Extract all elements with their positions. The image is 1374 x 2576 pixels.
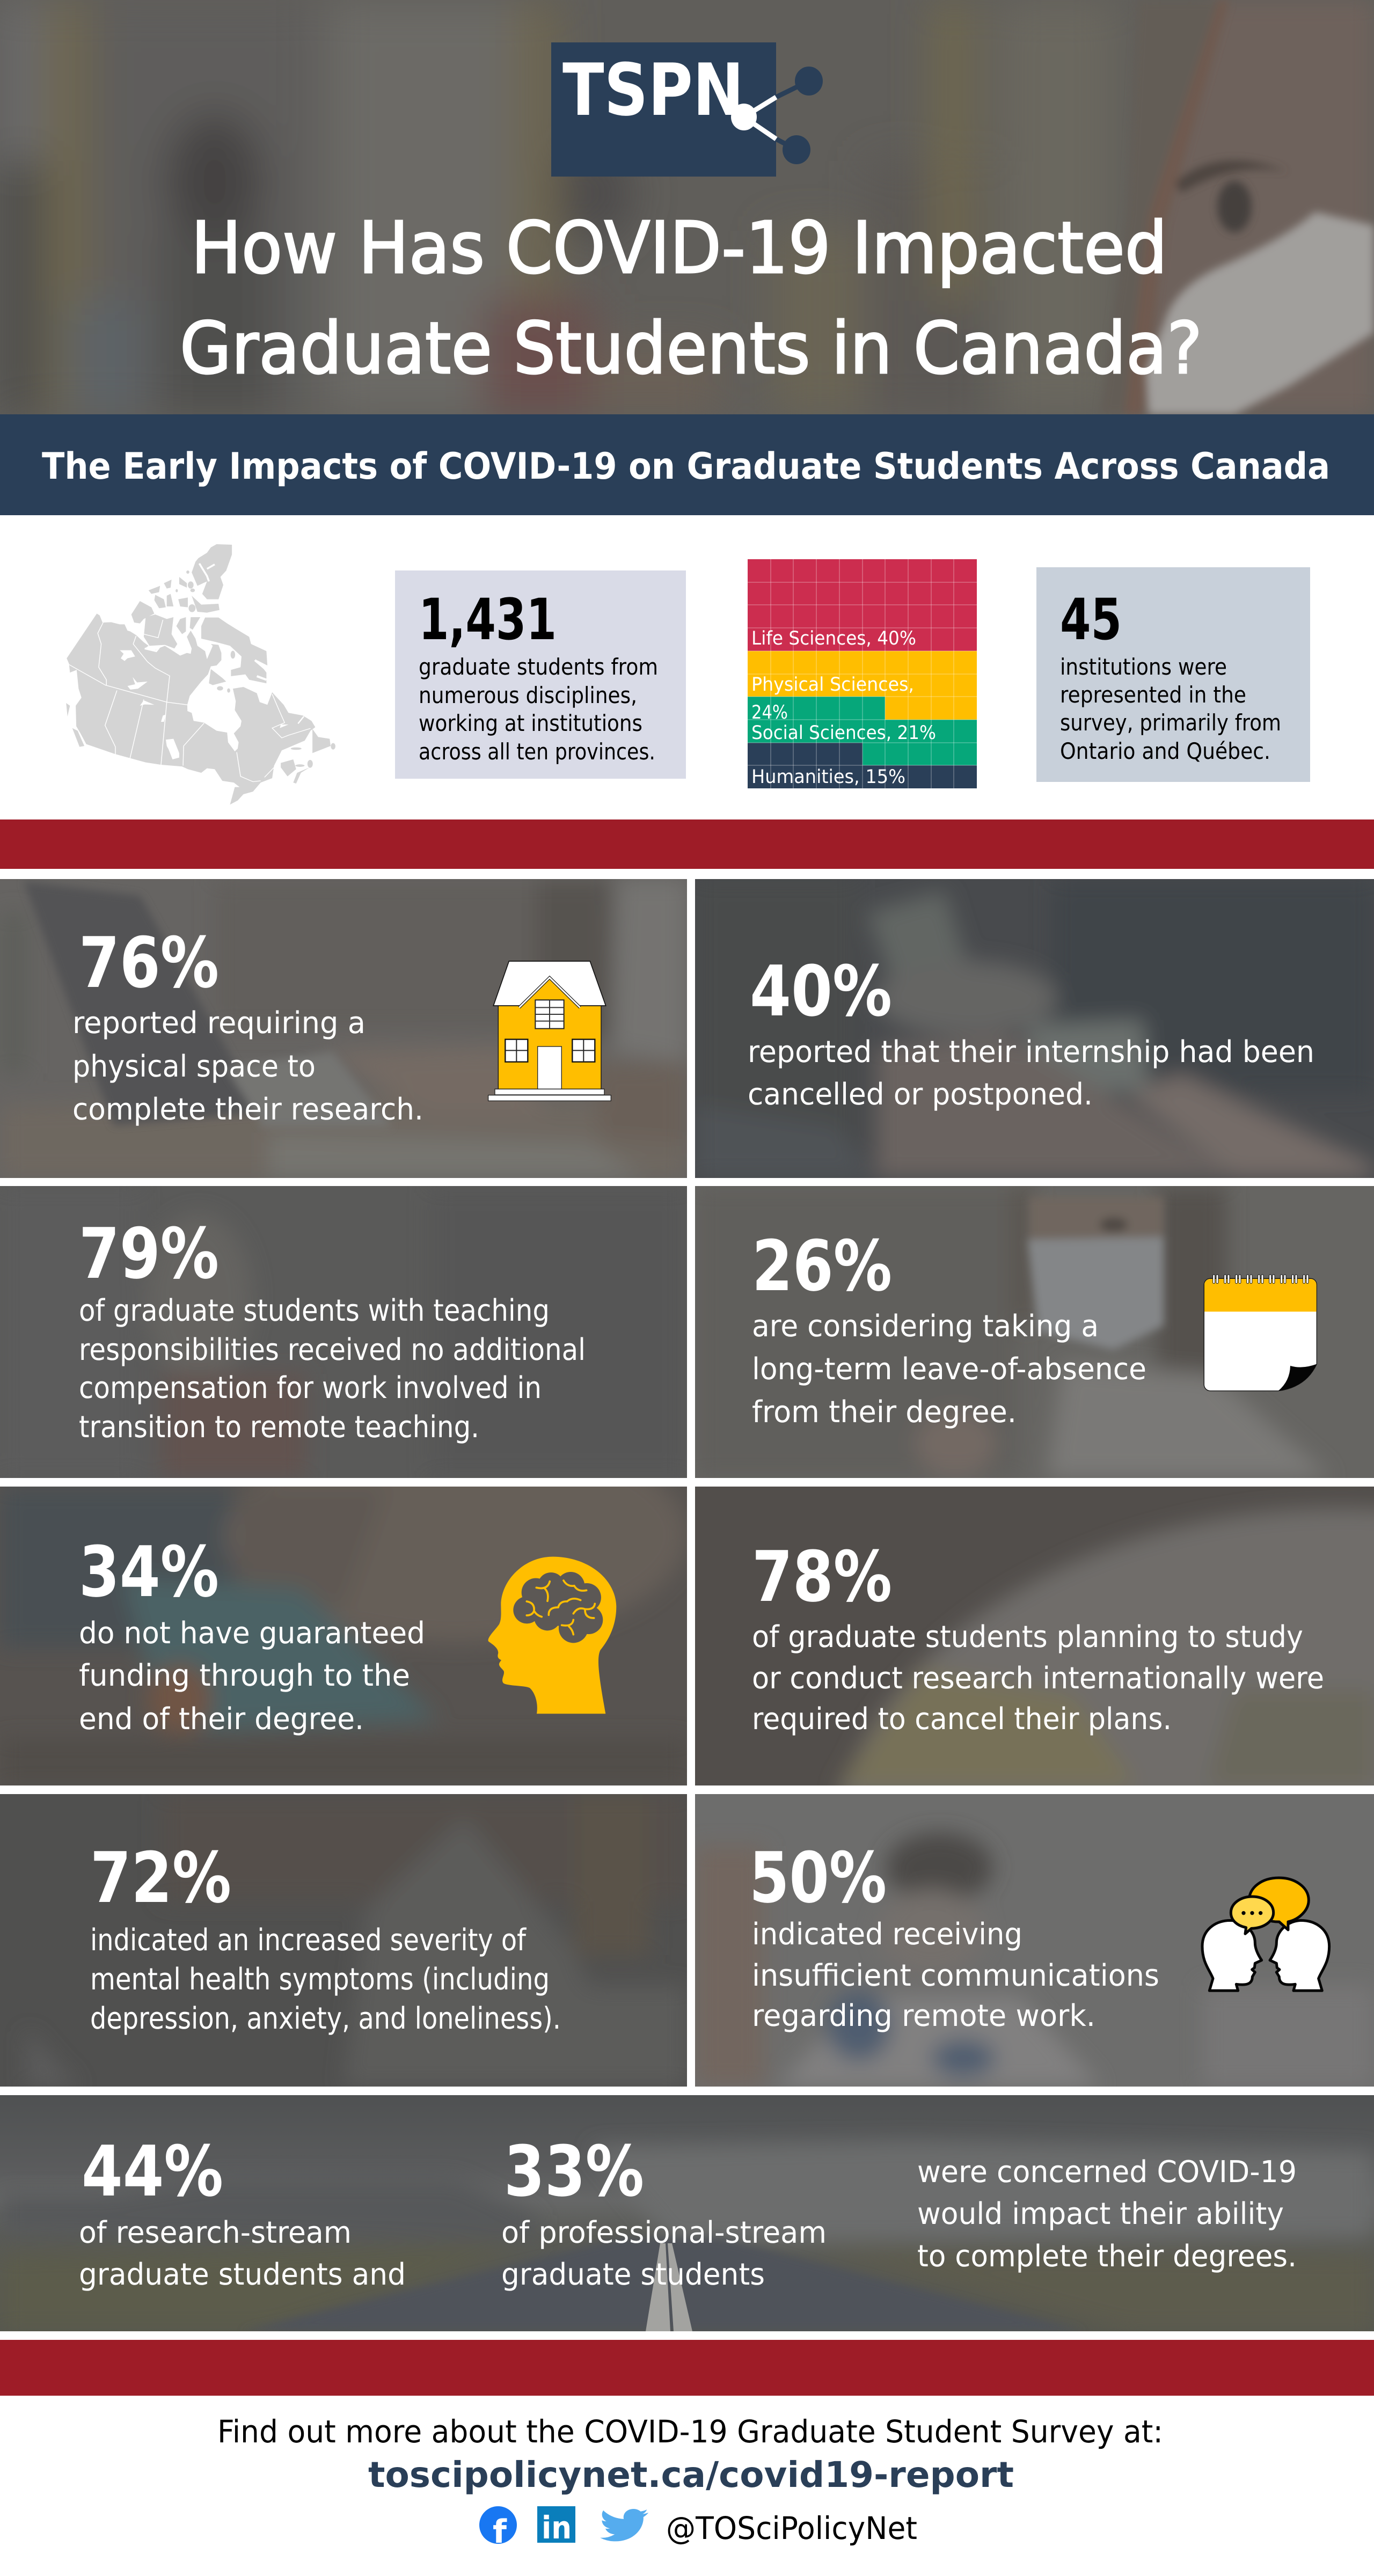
description xyxy=(752,1917,1159,2033)
description: long-term leave-of-absence xyxy=(752,1352,1146,1387)
description: indicated receiving xyxy=(752,1917,1022,1952)
description: mental health symptoms (including xyxy=(90,1962,550,1997)
icon: facebook: f xyxy=(493,2513,507,2551)
description: physical space to xyxy=(72,1049,316,1084)
panel: 79% teaching xyxy=(0,1186,687,1478)
description: cancelled or postponed. xyxy=(748,1077,1093,1112)
description xyxy=(72,1006,423,1127)
icon: head with brain xyxy=(488,1557,616,1714)
description: institutions were xyxy=(1060,654,1227,680)
number 50%: 50% xyxy=(749,1837,887,1919)
description: represented in the xyxy=(1060,682,1246,708)
description: from their degree. xyxy=(752,1395,1017,1430)
description: survey, primarily from xyxy=(1060,709,1281,736)
icon: calendar xyxy=(1204,1275,1317,1391)
description xyxy=(752,1620,1324,1737)
description: required to cancel their plans. xyxy=(752,1702,1172,1737)
stat card: 1,431 graduate students xyxy=(395,570,686,779)
footer xyxy=(0,2399,1374,2576)
icon: house xyxy=(488,961,611,1101)
logo: TSPN xyxy=(551,42,823,177)
number 76%: 76% xyxy=(79,922,219,1004)
description: responsibilities received no additional xyxy=(79,1333,586,1367)
description: compensation for work involved in xyxy=(79,1371,542,1406)
description: concerned about completion: were concerned COVID-19 xyxy=(917,2155,1297,2190)
number 45: 45 xyxy=(1060,587,1122,653)
number 40%: 40% xyxy=(750,950,892,1032)
description: or conduct research internationally were xyxy=(752,1661,1324,1696)
panel: 78% international xyxy=(695,1487,1374,1785)
description: graduate students from xyxy=(419,654,658,680)
stat card: 45 institutions xyxy=(1036,567,1310,782)
description: depression, anxiety, and loneliness). xyxy=(90,2001,561,2036)
panel: 76% physical space xyxy=(0,879,687,1178)
description: transition to remote teaching. xyxy=(79,1410,479,1445)
description: numerous disciplines, xyxy=(419,682,637,708)
description: of graduate students with teaching xyxy=(79,1293,550,1328)
description: reported requiring a xyxy=(72,1006,366,1041)
number 44%: 44% xyxy=(82,2131,223,2212)
header photo panel xyxy=(0,0,1374,414)
description: are considering taking a xyxy=(752,1309,1099,1344)
description xyxy=(90,1923,561,2036)
number 26%: 26% xyxy=(752,1225,892,1307)
label: Humanities: Humanities, 15% xyxy=(751,766,905,788)
label: Physical Sciences: 24% xyxy=(751,702,788,723)
number 79%: 79% xyxy=(79,1213,219,1294)
logo: TSPN: TSPN xyxy=(562,48,744,132)
description: Ontario and Québec. xyxy=(1060,738,1270,764)
subtitle banner xyxy=(0,414,1374,515)
title xyxy=(180,207,1202,390)
panel: 72% mental health xyxy=(0,1794,687,2087)
social handle: @TOSciPolicyNet xyxy=(666,2510,917,2546)
description: concerned about completion xyxy=(917,2155,1297,2274)
label: Physical Sciences: Physical Sciences, xyxy=(751,674,914,696)
icon: two heads talking xyxy=(1202,1878,1329,1990)
label: Physical Sciences xyxy=(751,674,914,723)
description xyxy=(79,1293,586,1445)
description: concerned about completion: would impact their ability xyxy=(917,2197,1284,2231)
title: How Has COVID-19 Impacted xyxy=(191,207,1167,290)
icon: linkedin: in xyxy=(542,2509,572,2546)
description: indicated an increased severity of xyxy=(90,1923,527,1958)
description: complete their research. xyxy=(72,1092,423,1127)
icon: facebook xyxy=(479,2506,517,2551)
panel: 50% communications xyxy=(695,1794,1374,2087)
description xyxy=(1060,654,1281,764)
description xyxy=(419,654,658,765)
panel: 40% internship xyxy=(695,879,1374,1178)
description: insufficient communications xyxy=(752,1958,1159,1993)
map of Canada xyxy=(66,544,335,804)
description: professional-stream xyxy=(501,2215,827,2292)
label: Social Sciences: Social Sciences, 21% xyxy=(751,722,936,744)
description: working at institutions xyxy=(419,710,642,736)
report link: toscipolicynet.ca/covid19-report xyxy=(368,2454,1014,2496)
description: do not have guaranteed xyxy=(79,1616,425,1651)
description xyxy=(748,1035,1314,1112)
red band bottom xyxy=(0,2340,1374,2396)
description: funding through to the xyxy=(79,1658,410,1693)
panel: 44% and 33% concerned xyxy=(0,2095,1374,2331)
description: research-stream: graduate students and xyxy=(79,2257,406,2292)
description: professional-stream: of professional-stream xyxy=(501,2215,827,2250)
description: research-stream xyxy=(79,2215,406,2292)
description xyxy=(79,1616,425,1737)
description xyxy=(752,1309,1146,1430)
panel: 34% funding xyxy=(0,1487,687,1785)
description: across all ten provinces. xyxy=(419,738,655,765)
description: research-stream: of research-stream xyxy=(79,2215,352,2250)
description: reported that their internship had been xyxy=(748,1035,1314,1070)
call to action text: Find out more about the COVID-19 Graduate Student Survey at: xyxy=(217,2413,1163,2450)
description: end of their degree. xyxy=(79,1702,364,1737)
description: of graduate students planning to study xyxy=(752,1620,1303,1655)
label: Life Sciences: Life Sciences, 40% xyxy=(751,628,916,649)
panel: 26% leave of absence xyxy=(695,1186,1374,1478)
red band top xyxy=(0,819,1374,869)
description: regarding remote work. xyxy=(752,1999,1095,2033)
icon: twitter xyxy=(600,2509,648,2541)
number 1,431: 1,431 xyxy=(419,587,557,653)
number 78%: 78% xyxy=(752,1536,892,1618)
description: professional-stream: graduate students xyxy=(501,2257,765,2292)
description: concerned about completion: to complete their degrees. xyxy=(917,2239,1297,2274)
number 33%: 33% xyxy=(504,2131,644,2212)
number 72%: 72% xyxy=(90,1837,231,1919)
number 34%: 34% xyxy=(79,1531,219,1613)
waffle chart: disciplines xyxy=(748,559,977,788)
